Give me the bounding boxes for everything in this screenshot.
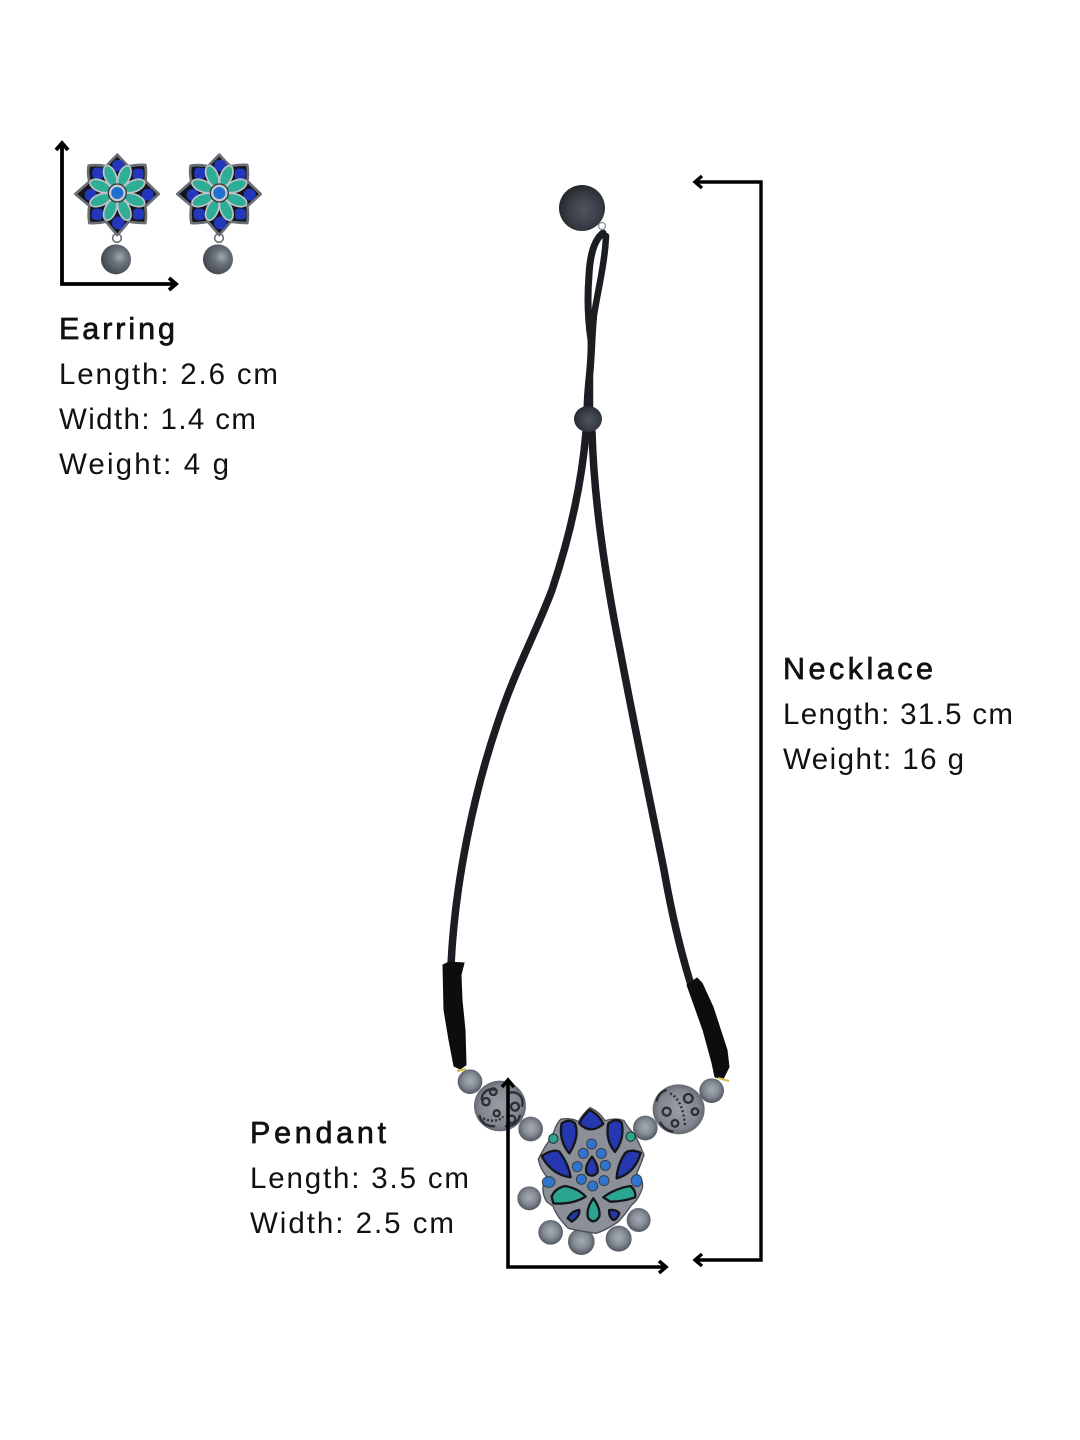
text: necklace weight: Weight: 16 g [783, 743, 964, 776]
text: earring weight: Weight: 4 g [59, 448, 229, 481]
arrow: pendant dimensions [502, 1080, 666, 1273]
heading: pendant: Pendant [250, 1116, 387, 1150]
text: pendant length: Length: 3.5 cm [250, 1162, 469, 1195]
right thread wrap [687, 978, 729, 1079]
left textured bead [474, 1081, 526, 1131]
icon: left earring [75, 155, 159, 274]
blue petals [542, 1110, 641, 1222]
pendant assembly [458, 1069, 724, 1255]
pearls [458, 1069, 724, 1255]
blue dots [542, 1139, 642, 1191]
heading: earring: Earring [59, 312, 175, 346]
arrow: earring dimensions [56, 143, 176, 290]
left thread wrap [443, 962, 466, 1069]
sliding bead [574, 406, 602, 432]
gold spacers [457, 1069, 729, 1081]
cord [451, 233, 692, 988]
text: necklace length: Length: 31.5 cm [783, 698, 1013, 731]
text block: pendant specs [250, 1116, 469, 1240]
necklace [443, 185, 729, 1081]
bracket: necklace length [695, 176, 761, 1266]
text block: necklace specs [783, 652, 1013, 776]
pendant silver body [538, 1108, 644, 1233]
heading: necklace: Necklace [783, 652, 933, 686]
text block: earring specs [59, 312, 278, 481]
text: earring width: Width: 1.4 cm [59, 403, 256, 436]
clasp ring [598, 222, 606, 230]
green petals [552, 1186, 635, 1221]
teal dots [549, 1132, 635, 1143]
icon: earring pair [75, 155, 261, 274]
right textured bead [653, 1084, 705, 1134]
clasp ball [559, 185, 605, 231]
text: pendant width: Width: 2.5 cm [250, 1207, 454, 1240]
text: earring length: Length: 2.6 cm [59, 358, 278, 391]
icon: right earring [177, 155, 261, 274]
